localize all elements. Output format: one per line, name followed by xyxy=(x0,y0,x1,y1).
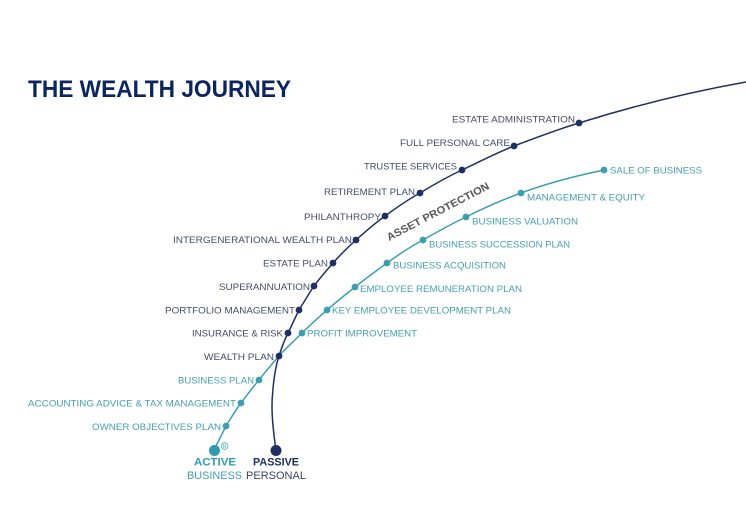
active start marker xyxy=(209,445,220,456)
passive personal labels: FULL PERSONAL CARE xyxy=(400,138,510,149)
active business labels: PROFIT IMPROVEMENT xyxy=(307,328,417,340)
active milestone markers xyxy=(223,167,607,429)
title: THE WEALTH JOURNEY xyxy=(28,76,291,103)
passive start marker xyxy=(270,445,282,456)
active business labels xyxy=(28,166,702,433)
passive personal labels: WEALTH PLAN xyxy=(204,352,274,363)
business sublabel: BUSINESS xyxy=(187,470,242,482)
active business labels: SALE OF BUSINESS xyxy=(610,166,702,176)
passive personal labels: PORTFOLIO MANAGEMENT xyxy=(165,306,295,316)
passive personal labels: SUPERANNUATION xyxy=(219,282,310,293)
passive personal labels: RETIREMENT PLAN xyxy=(324,187,415,198)
active business labels: OWNER OBJECTIVES PLAN xyxy=(92,422,221,433)
passive personal labels: INTERGENERATIONAL WEALTH PLAN xyxy=(173,235,352,246)
active business labels: KEY EMPLOYEE DEVELOPMENT PLAN xyxy=(332,306,511,316)
registered mark: R xyxy=(223,444,227,450)
active business labels: MANAGEMENT & EQUITY xyxy=(527,192,646,204)
active business labels: BUSINESS SUCCESSION PLAN xyxy=(429,240,570,250)
passive personal labels: PHILANTHROPY xyxy=(304,212,382,223)
passive personal labels xyxy=(165,114,575,363)
asset protection label: ASSET PROTECTION xyxy=(385,180,492,244)
passive personal labels: INSURANCE & RISK xyxy=(192,328,284,340)
active business labels: BUSINESS ACQUISITION xyxy=(393,260,506,272)
active business labels: ACCOUNTING ADVICE & TAX MANAGEMENT xyxy=(28,398,236,410)
passive personal labels: ESTATE ADMINISTRATION xyxy=(452,114,575,126)
active business labels: BUSINESS PLAN xyxy=(178,376,254,386)
curve: active business path xyxy=(214,170,604,450)
passive personal labels: ESTATE PLAN xyxy=(263,258,328,270)
personal sublabel: PERSONAL xyxy=(246,470,306,482)
active heading: ACTIVE xyxy=(194,456,236,468)
active business labels: BUSINESS VALUATION xyxy=(472,216,578,228)
active business labels: EMPLOYEE REMUNERATION PLAN xyxy=(360,284,522,295)
passive heading: PASSIVE xyxy=(253,456,299,468)
curve: passive personal path xyxy=(272,82,746,450)
passive milestone markers xyxy=(276,120,582,359)
registered mark xyxy=(221,443,228,450)
passive personal labels: TRUSTEE SERVICES xyxy=(364,162,457,172)
